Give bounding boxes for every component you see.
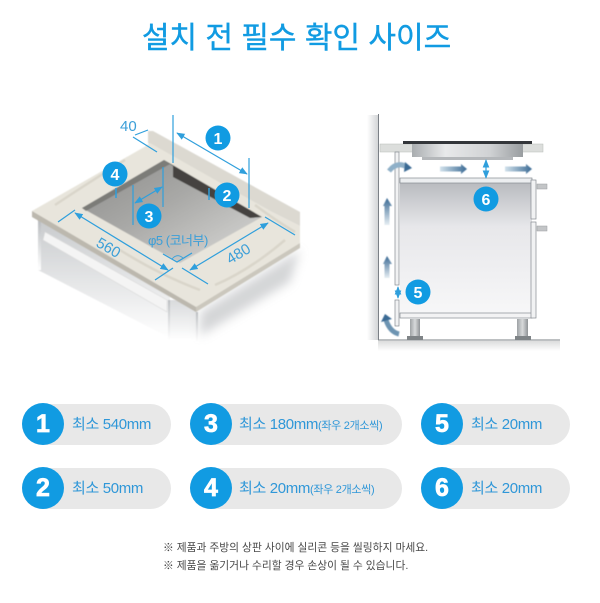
countertop front edge	[32, 211, 196, 312]
right diagram: cabinet side section	[367, 114, 560, 351]
dimension lines	[58, 115, 295, 284]
badge 5: 5	[435, 410, 449, 438]
marker 3: 3	[145, 209, 154, 226]
label 2: 최소 50mm	[72, 480, 143, 497]
marker 6	[474, 186, 498, 212]
title: 설치 전 필수 확인 사이즈	[142, 22, 451, 55]
spec 6	[421, 468, 570, 509]
marker 2	[214, 182, 240, 208]
badge 2	[22, 467, 64, 509]
back panel upper	[395, 152, 399, 285]
spec 2	[22, 468, 171, 509]
badge 4: 4	[204, 474, 218, 502]
back panel lower	[395, 300, 399, 326]
marker 1: 1	[214, 131, 223, 148]
label 1: 최소 540mm	[72, 416, 151, 433]
countertop and sink	[32, 131, 300, 312]
note 2: ※ 제품을 옮기거나 수리할 경우 손상이 될 수 있습니다.	[163, 560, 408, 572]
marker 4	[102, 162, 128, 186]
handles	[537, 184, 547, 231]
cabinet body	[400, 178, 532, 318]
spec 5	[421, 404, 570, 445]
label 6: 최소 20mm	[471, 480, 542, 497]
cabinet below countertop	[38, 218, 300, 342]
badge 4	[190, 467, 232, 509]
cooktop	[403, 141, 532, 160]
dimension label: 40: 40	[120, 118, 137, 135]
marble veins	[55, 160, 295, 290]
spec 3	[190, 404, 402, 445]
marker 6: 6	[482, 192, 491, 209]
marker 1	[206, 126, 230, 150]
badge 6: 6	[435, 474, 449, 502]
wall	[367, 115, 378, 340]
marker 3	[136, 204, 162, 228]
marker 2: 2	[223, 188, 232, 205]
dimension label: 560: 560	[93, 234, 123, 262]
airflow arrows	[381, 162, 532, 334]
label 3: 최소 180mm(좌우 2개소씩)	[239, 416, 382, 433]
note 1: ※ 제품과 주방의 상판 사이에 실리콘 등을 씰링하지 마세요.	[163, 542, 428, 554]
dimension label: 480: 480	[224, 240, 254, 268]
marker 5: 5	[414, 285, 423, 302]
label 5: 최소 20mm	[471, 416, 542, 433]
dimension arrows	[398, 160, 486, 298]
badge 5	[421, 403, 463, 445]
badge 3	[190, 403, 232, 445]
spec 1	[22, 404, 171, 445]
dimension label: corner radius: φ5 (코너부)	[148, 233, 208, 248]
badge 6	[421, 467, 463, 509]
diagrams	[32, 114, 560, 348]
badge 1	[22, 403, 64, 445]
left diagram: countertop with cutout	[32, 115, 300, 342]
sink cutout	[82, 160, 262, 263]
counter	[380, 144, 543, 152]
floor	[378, 340, 560, 351]
cabinet legs	[407, 319, 531, 340]
back wall strip	[148, 131, 300, 226]
badge 2: 2	[36, 474, 50, 502]
marker 5	[406, 280, 430, 304]
cabinet doors	[531, 180, 536, 318]
badge 1: 1	[36, 410, 50, 438]
spec 4	[190, 468, 402, 509]
badge 3: 3	[204, 410, 218, 438]
label 4: 최소 20mm(좌우 2개소씩)	[239, 480, 374, 497]
marker 4: 4	[111, 167, 120, 184]
countertop surface	[32, 143, 300, 307]
